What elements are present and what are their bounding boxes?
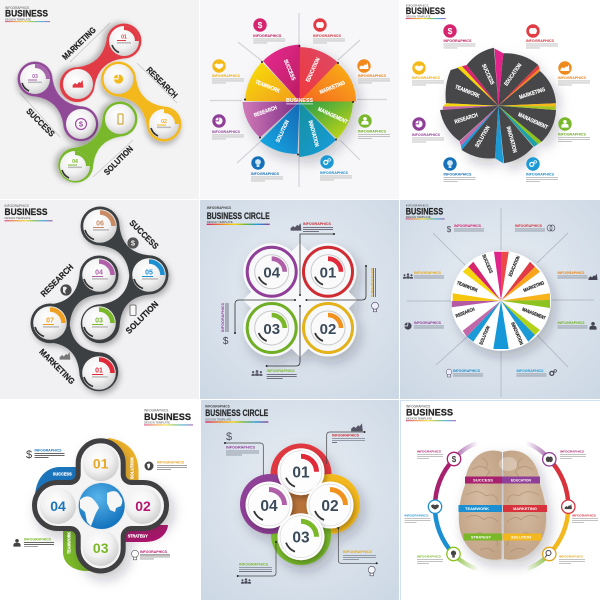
dial 03: 03 [292, 530, 310, 547]
caption: bottom left: INFOGRAPHICS [453, 369, 481, 373]
top caption: INFOGRAPHICS [303, 222, 332, 226]
item: person [358, 114, 390, 139]
dark pie labels: MANAGEMENT [517, 112, 549, 131]
title [144, 408, 193, 425]
band labels: EDUCATION [511, 478, 531, 482]
caption: magenta left [417, 450, 443, 459]
caption: bulb: INFOGRAPHICS [140, 550, 167, 554]
label: solution: SOLUTION [102, 144, 135, 177]
caption: yellow [559, 554, 585, 564]
title: BUSINESS [406, 206, 443, 216]
title: DESIGN TEMPLATE [406, 14, 431, 18]
centre label: BUSINESS [286, 98, 313, 104]
dark pie labels: MARKETING [519, 87, 546, 101]
item: gears [320, 155, 352, 180]
title: INFOGRAPHICS [144, 408, 168, 412]
title: INFOGRAPHICS [406, 4, 429, 8]
ribbon: magenta [120, 525, 168, 542]
icon: chart [60, 352, 70, 360]
item: pie: INFOGRAPHICS [412, 133, 441, 137]
panel: brain ring [400, 400, 600, 600]
caption: purple [226, 431, 259, 455]
title: BUSINESS [144, 412, 191, 422]
dark pie labels: INNOVATION [505, 126, 517, 154]
title: INFOGRAPHICS [406, 204, 429, 208]
red dumbbell: 01 [121, 34, 127, 40]
dark pie labels: RESEARCH [454, 112, 479, 126]
caption: yellow: INFOGRAPHICS [343, 550, 373, 554]
caption: magenta left: INFOGRAPHICS [417, 450, 441, 454]
caption: purple: INFOGRAPHICS [226, 446, 256, 450]
leader lines [235, 234, 366, 366]
dial 03 [278, 513, 324, 560]
ribbon labels: STRATEGY [128, 534, 148, 538]
dial 02: 02 [320, 321, 336, 338]
bubble 02 [125, 488, 161, 524]
item: dollar [253, 18, 285, 43]
dark connectors [22, 198, 177, 399]
item: gears [526, 157, 558, 182]
bubble 04 [40, 488, 76, 524]
ring icons: $ [452, 455, 457, 464]
item: pie [412, 117, 444, 142]
item: brain: INFOGRAPHICS [313, 34, 342, 38]
title: DESIGN TEMPLATE [207, 220, 233, 224]
caption: left lower: INFOGRAPHICS [414, 321, 442, 325]
title: BUSINESS [406, 6, 445, 16]
pie labels: MARKETING [319, 80, 346, 96]
item: bulb: INFOGRAPHICS [251, 172, 280, 176]
caption: person: INFOGRAPHICS [24, 538, 51, 542]
item: dollar: INFOGRAPHICS [444, 39, 472, 43]
caption: globe: INFOGRAPHICS [157, 460, 184, 464]
band labels [465, 478, 537, 540]
wheel disc [451, 251, 551, 351]
dark cross [34, 441, 166, 571]
diagonal guide lines [20, 23, 177, 177]
item: person: INFOGRAPHICS [358, 130, 387, 134]
pie labels: RESEARCH [253, 105, 278, 119]
caption: green: INFOGRAPHICS [417, 554, 441, 558]
left caption: INFOGRAPHICS [221, 302, 225, 332]
icon: dollar [127, 237, 139, 249]
node 06 [83, 209, 117, 243]
panel: dark S chain [0, 198, 199, 399]
bubble 03 [83, 530, 119, 566]
title: DESIGN TEMPLATE [205, 418, 231, 422]
colour slivers [443, 48, 556, 164]
bottom caption [252, 369, 297, 379]
bubble 02: 02 [135, 498, 151, 514]
leader lines [225, 432, 377, 576]
bottom caption: INFOGRAPHICS [267, 369, 295, 373]
caption: top right: INFOGRAPHICS [515, 224, 543, 228]
caption: right upper: INFOGRAPHICS [558, 271, 585, 275]
dial 01: 01 [292, 465, 310, 482]
title [4, 204, 52, 221]
item: dollar: INFOGRAPHICS [253, 34, 282, 38]
bubble 01 [83, 445, 119, 481]
right caption: INFOGRAPHICS [370, 268, 374, 298]
caption: bottom left [446, 369, 483, 377]
title: INFOGRAPHICS [207, 206, 231, 210]
pie labels: TEAMWORK [254, 79, 281, 95]
caption: magenta right [560, 450, 586, 459]
item: chart [558, 61, 590, 85]
item: brain: INFOGRAPHICS [526, 39, 555, 43]
yellow dumbbell [94, 54, 189, 149]
item: chart: INFOGRAPHICS [558, 76, 587, 80]
dial 02 [304, 304, 352, 352]
icon: phone [130, 305, 136, 316]
caption: red: INFOGRAPHICS [332, 434, 360, 438]
label: marketing: MARKETING [60, 25, 98, 62]
caption: left lower [404, 321, 444, 330]
item: person: INFOGRAPHICS [558, 132, 587, 136]
pie chart [242, 44, 356, 157]
pie labels: SOLUTION [275, 119, 291, 144]
wheel labels: TEAMWORK [456, 280, 479, 294]
bubble 04: 04 [50, 498, 66, 514]
caption: right lower [558, 321, 597, 330]
caption: red [332, 423, 365, 443]
item: person [558, 117, 590, 142]
title: DESIGN TEMPLATE [4, 216, 31, 220]
node 04 [82, 258, 116, 292]
caption: bulb [132, 550, 170, 560]
caption: top left: $ [447, 225, 452, 234]
title [406, 204, 445, 219]
green dumbbell [51, 94, 145, 190]
left caption: $ [223, 336, 229, 347]
title: BUSINESS CIRCLE [205, 408, 268, 419]
item: bulb [443, 157, 476, 182]
caption: red [572, 514, 598, 523]
ribbon labels: SUCCESS [53, 472, 72, 476]
dial 03: 03 [263, 321, 280, 338]
caption: blue [404, 514, 430, 523]
title: DESIGN TEMPLATE [5, 18, 31, 22]
item: handshake: INFOGRAPHICS [412, 76, 441, 80]
ribbon: blue [35, 467, 80, 498]
dial 01 [304, 247, 352, 296]
ring arcs [435, 443, 568, 569]
wheel labels: INNOVATION [509, 321, 524, 346]
node 04: 04 [95, 270, 103, 276]
caption: yellow: INFOGRAPHICS [559, 554, 583, 558]
leader dots [224, 431, 378, 577]
dial 02: 02 [321, 498, 339, 515]
node 01: 01 [95, 368, 103, 374]
band labels: TEAMWORK [465, 507, 489, 511]
caption: green [239, 562, 272, 584]
ribbon labels [53, 457, 148, 554]
dark pie labels: EDUCATION [504, 63, 523, 87]
dial 03 [247, 304, 296, 352]
item: dollar: $ [448, 26, 453, 36]
item: chart: INFOGRAPHICS [358, 74, 387, 78]
item: dollar: $ [258, 20, 263, 30]
dial 04 [246, 482, 292, 528]
item: gears: INFOGRAPHICS [526, 172, 555, 176]
label: success: SUCCESS [128, 218, 161, 251]
item: handshake [412, 61, 444, 85]
caption: yellow [343, 550, 376, 576]
title [406, 4, 446, 19]
panel: colour pie [200, 0, 399, 199]
item: pie: INFOGRAPHICS [212, 130, 241, 134]
icon: dollar: $ [131, 239, 136, 248]
yellow dumbbell: 02 [161, 119, 167, 125]
label: solution: SOLUTION [123, 299, 160, 336]
right caption [370, 268, 378, 312]
label: marketing: MARKETING [37, 347, 77, 386]
panel: business circle clover [200, 200, 399, 399]
dark pie chart [440, 48, 556, 163]
dark pie labels: SOLUTION [475, 125, 492, 149]
title [207, 206, 270, 225]
node 06: 06 [96, 220, 104, 228]
wheel labels: SOLUTION [478, 325, 492, 346]
title: INFOGRAPHICS [205, 404, 230, 408]
caption: purple: $ [226, 431, 232, 443]
dial 04 [247, 247, 296, 296]
ribbon labels: SOLUTION [130, 457, 134, 479]
band labels: SOLUTION [511, 536, 531, 540]
icon: globe [60, 284, 72, 296]
caption: globe [144, 460, 187, 470]
node 05 [132, 258, 166, 292]
caption: blue: INFOGRAPHICS [404, 514, 429, 518]
caption: dollar: $ [26, 449, 32, 461]
title [205, 404, 268, 423]
label: research: RESEARCH [38, 262, 75, 299]
panel: globe cross [0, 400, 199, 600]
pie labels: SUCCESS [282, 59, 296, 82]
pie dots [244, 45, 354, 156]
ribbon: green [63, 525, 90, 571]
wheel labels: MANAGEMENT [521, 307, 546, 322]
title: INFOGRAPHICS [406, 404, 430, 408]
band labels: SUCCESS [473, 478, 494, 482]
purple dumbbell [10, 54, 105, 148]
dial 01: 01 [320, 265, 336, 282]
caption: magenta right: INFOGRAPHICS [560, 450, 584, 454]
panel: white wheel [400, 200, 600, 399]
caption: bottom right [516, 369, 557, 376]
wheel labels: RESEARCH [455, 306, 476, 320]
wheel labels: EDUCATION [508, 255, 522, 278]
dial 04: 04 [260, 498, 278, 515]
white clover [243, 243, 357, 357]
caption: right upper [558, 271, 598, 280]
dial 04: 04 [263, 265, 281, 282]
purple dumbbell: $ [79, 120, 84, 129]
title: BUSINESS [4, 207, 48, 217]
frame edge [400, 400, 600, 600]
coloured discs [240, 444, 360, 565]
caption: green [417, 554, 443, 564]
caption: top left [447, 224, 484, 234]
caption: left upper: INFOGRAPHICS [414, 271, 442, 275]
title: BUSINESS [5, 9, 48, 19]
label: research: RESEARCH [144, 65, 180, 100]
caption: top left: INFOGRAPHICS [454, 224, 482, 228]
caption: top right [515, 224, 555, 231]
pie labels: MANAGEMENT [317, 107, 349, 126]
caption: person [13, 538, 54, 547]
wheel labels: MARKETING [523, 280, 545, 294]
globe [77, 482, 126, 530]
panel: marketing research dumbbells [0, 0, 199, 199]
caption: left upper [403, 271, 444, 279]
dark pie labels: TEAMWORK [454, 84, 480, 100]
ring nodes [428, 452, 575, 561]
wheel colour wedges [452, 252, 550, 349]
ribbon labels: TEAMWORK [66, 531, 72, 554]
item: brain [526, 24, 558, 48]
left caption [221, 302, 229, 347]
caption: right lower: INFOGRAPHICS [558, 321, 585, 325]
item: handshake [212, 59, 244, 83]
leader dots [234, 233, 367, 367]
dark pie labels: SUCCESS [480, 63, 495, 86]
title: INFOGRAPHICS [4, 204, 29, 208]
band labels: MARKETING [513, 507, 537, 511]
item: chart [357, 59, 390, 83]
title: BUSINESS [406, 408, 453, 418]
pie labels: EDUCATION [305, 57, 322, 83]
purple dumbbell: 03 [32, 74, 38, 80]
item: gears: INFOGRAPHICS [320, 171, 349, 175]
spokes [407, 208, 594, 397]
item: bulb [251, 156, 283, 181]
bubble 03: 03 [93, 540, 109, 556]
wheel labels: SUCCESS [480, 254, 494, 275]
panel: overlapping circles [201, 400, 399, 600]
caption: red: INFOGRAPHICS [572, 514, 596, 518]
pie labels: INNOVATION [307, 120, 319, 148]
title: BUSINESS CIRCLE [207, 211, 270, 222]
caption: green: INFOGRAPHICS [239, 562, 269, 566]
panel: dark pie [400, 0, 600, 199]
caption: bottom right: INFOGRAPHICS [516, 369, 544, 373]
node 07 [33, 306, 67, 340]
pie labels [253, 57, 349, 148]
title [406, 404, 456, 421]
band labels: STRATEGY [471, 536, 491, 540]
title: DESIGN TEMPLATE [406, 416, 432, 420]
wheel labels [455, 254, 546, 346]
item: pie [212, 114, 244, 139]
title: INFOGRAPHICS [5, 6, 29, 10]
node 03 [82, 306, 116, 340]
title [5, 6, 50, 22]
dial 01 [278, 448, 324, 495]
dial 02 [306, 482, 354, 528]
title: DESIGN TEMPLATE [144, 420, 170, 424]
node 05: 05 [145, 270, 153, 276]
ribbon: yellow [108, 438, 138, 484]
label: success: SUCCESS [24, 106, 57, 139]
red dumbbell [52, 16, 149, 109]
node 07: 07 [46, 318, 54, 324]
item: dollar [443, 24, 476, 48]
green dumbbell: 04 [72, 159, 78, 165]
node 03: 03 [95, 318, 103, 324]
brain bands [458, 476, 547, 540]
item: bulb: INFOGRAPHICS [444, 172, 472, 176]
node 01 [82, 356, 116, 390]
brain [459, 450, 546, 560]
spokes [210, 13, 387, 187]
top caption [291, 222, 333, 232]
centre tile [288, 492, 312, 516]
dark pie labels [454, 63, 549, 154]
item: brain [313, 18, 345, 43]
caption: dollar [26, 448, 64, 461]
caption: dollar: INFOGRAPHICS [34, 448, 62, 452]
item: handshake: INFOGRAPHICS [212, 74, 241, 78]
title: DESIGN TEMPLATE [406, 215, 431, 219]
ring icons [431, 455, 572, 558]
bubble 01: 01 [93, 456, 109, 472]
